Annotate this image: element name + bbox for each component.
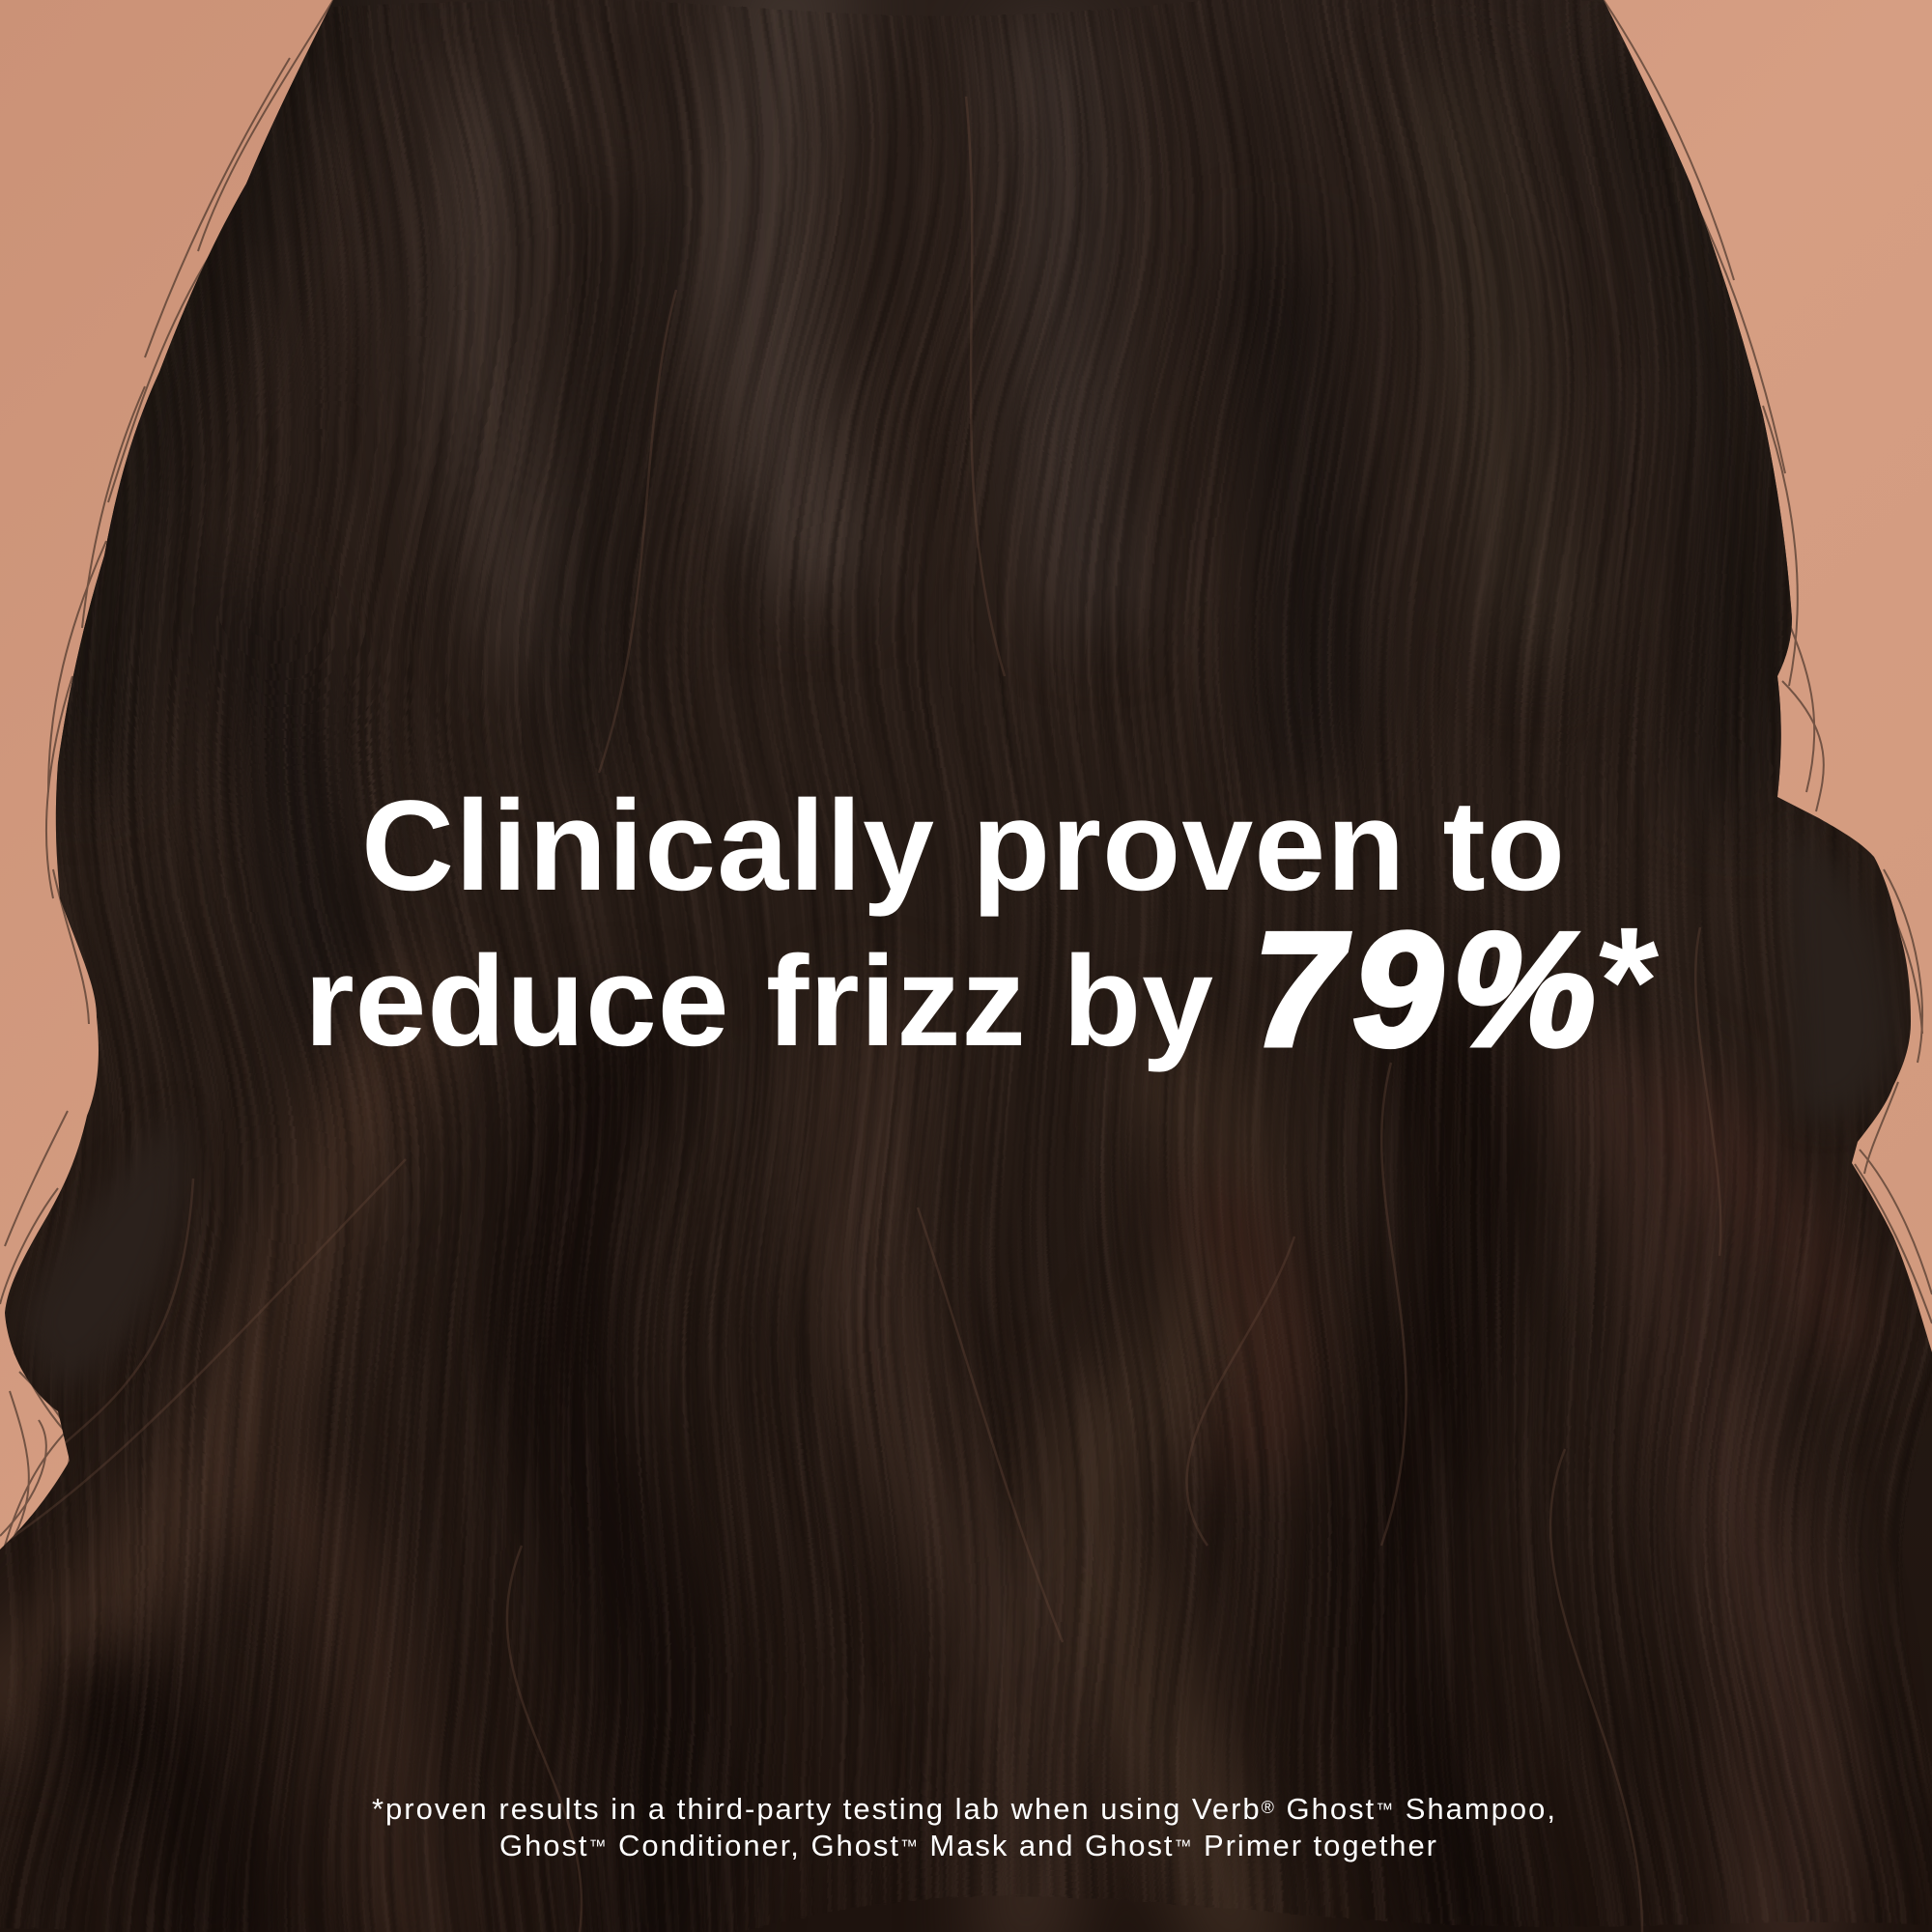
footnote line 2: Conditioner, Ghost [608,1829,898,1862]
statistic: 79%: 79% [1253,898,1596,1080]
footnote line 2: ™ [588,1836,606,1856]
footnote line 2: Ghost [499,1829,587,1862]
footnote line 1: Shampoo, [1395,1792,1555,1826]
curled tufts at the left and right edges [35,873,1884,1377]
footnote line 1: Ghost [1276,1792,1375,1826]
footnote line 2: Primer together [1193,1829,1436,1862]
footnote line 1: ® [1262,1798,1274,1817]
photo: flyaway strands around hair edge [0,0,1932,1546]
footnote line 2: Mask and Ghost [920,1829,1173,1862]
headline [304,775,1660,1080]
asterisk: * [1599,895,1660,1067]
headline line 2: reduce frizz by [304,930,1213,1073]
footnote line 2: ™ [900,1836,918,1856]
footnote line 2: ™ [1174,1836,1191,1856]
footnote line 1: *proven results in a third-party testing lab when using Verb [372,1792,1260,1826]
headline line 1: Clinically proven to [361,775,1565,918]
footnote line 1: ™ [1376,1800,1393,1819]
footnote [372,1792,1555,1862]
